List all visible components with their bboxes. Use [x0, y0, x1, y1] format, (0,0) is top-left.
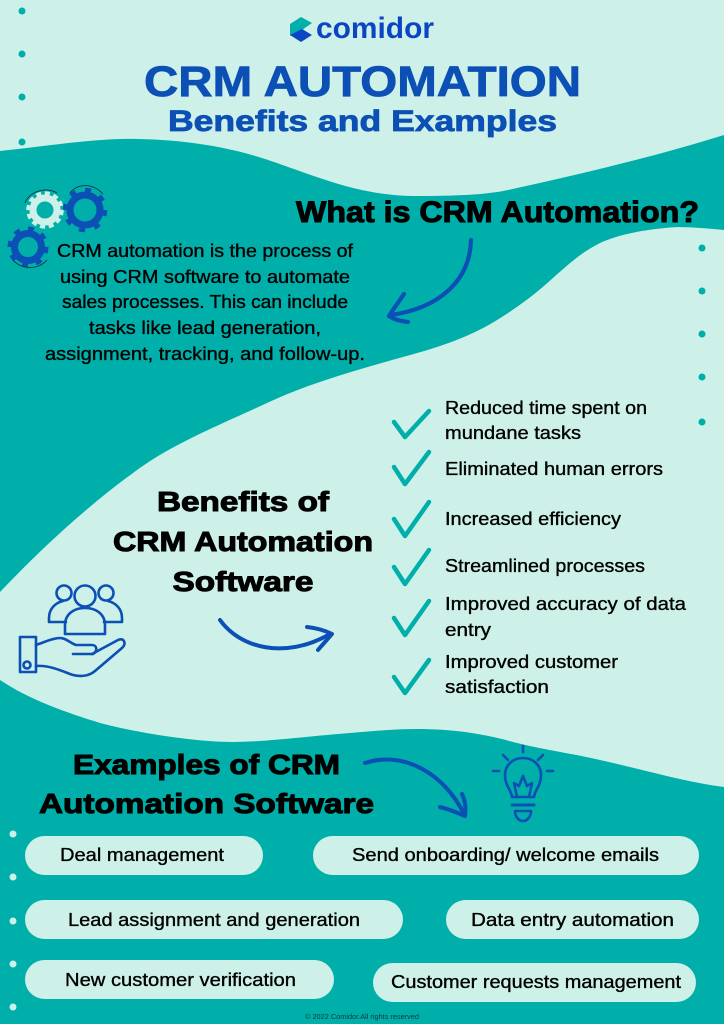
- dots: right: [698, 244, 706, 426]
- heading: benefits: [113, 486, 373, 597]
- heading: examples: Automation Software: [39, 788, 374, 819]
- gear: blue top: [65, 186, 105, 230]
- arrow: benefits: [220, 620, 332, 650]
- dots: top left: [18, 8, 26, 146]
- benefit items: Increased efficiency: [445, 509, 621, 529]
- benefit items: Improved accuracy of data: [445, 594, 687, 614]
- pill: deal management: Deal management: [60, 845, 224, 865]
- heading: benefits: Benefits of: [157, 486, 330, 517]
- text block: definition: CRM automation is the process of: [57, 241, 354, 261]
- arrow: examples: [365, 760, 465, 816]
- text block: definition: [45, 241, 365, 364]
- pill: onboarding emails: Send onboarding/ welcome emails: [352, 845, 659, 865]
- icon: people on hand: [20, 586, 125, 676]
- checklist: benefits: [394, 398, 687, 697]
- heading: examples: Examples of CRM: [73, 749, 340, 780]
- benefit items: Reduced time spent on: [445, 398, 647, 418]
- heading: examples: [39, 749, 374, 819]
- text block: definition: assignment, tracking, and follow-up.: [45, 344, 365, 364]
- pill: customer requests: Customer requests management: [391, 972, 681, 992]
- heading: what is CRM automation: What is CRM Automation?: [296, 196, 699, 229]
- pill: lead assignment: [25, 900, 403, 939]
- gear: blue bottom: [10, 229, 47, 268]
- benefit items: Streamlined processes: [445, 556, 645, 576]
- check icons: [394, 411, 429, 693]
- icon: light bulb: [493, 746, 553, 821]
- benefit items: satisfaction: [445, 677, 549, 697]
- arrow: definition: [389, 240, 471, 322]
- pill: lead assignment: Lead assignment and generation: [68, 910, 360, 930]
- benefit items: mundane tasks: [445, 423, 581, 443]
- gear: white: [25, 190, 62, 226]
- dots: bottom left: [10, 830, 16, 1010]
- text block: definition: sales processes. This can include: [62, 292, 348, 312]
- heading: benefits: CRM Automation: [113, 526, 373, 557]
- benefit items: Improved customer: [445, 652, 618, 672]
- benefit items: [445, 398, 687, 697]
- logo: comidor: [290, 12, 434, 45]
- logo wordmark: comidor: [316, 12, 434, 45]
- title: CRM AUTOMATION: [144, 58, 581, 106]
- text block: definition: using CRM software to automate: [60, 267, 350, 287]
- pill: customer verification: [25, 960, 334, 999]
- pills: examples: [25, 836, 699, 1002]
- pill: deal management: [25, 836, 263, 875]
- pill: customer verification: New customer verification: [65, 970, 296, 990]
- pill: data entry: [446, 900, 699, 939]
- benefit items: entry: [445, 620, 491, 640]
- light wave panel: benefits: [0, 227, 724, 787]
- icon: gears: [10, 186, 105, 268]
- pill: data entry: Data entry automation: [471, 910, 674, 930]
- text block: definition: tasks like lead generation,: [89, 318, 321, 338]
- benefit items: Eliminated human errors: [445, 459, 663, 479]
- pill: onboarding emails: [313, 836, 699, 875]
- subtitle: Benefits and Examples: [168, 105, 557, 138]
- pill: customer requests: [373, 963, 696, 1002]
- heading: benefits: Software: [172, 566, 314, 597]
- icon: logo hexagon: [290, 17, 312, 42]
- footer copyright: © 2022 Comidor.All rights reserved: [305, 1013, 419, 1021]
